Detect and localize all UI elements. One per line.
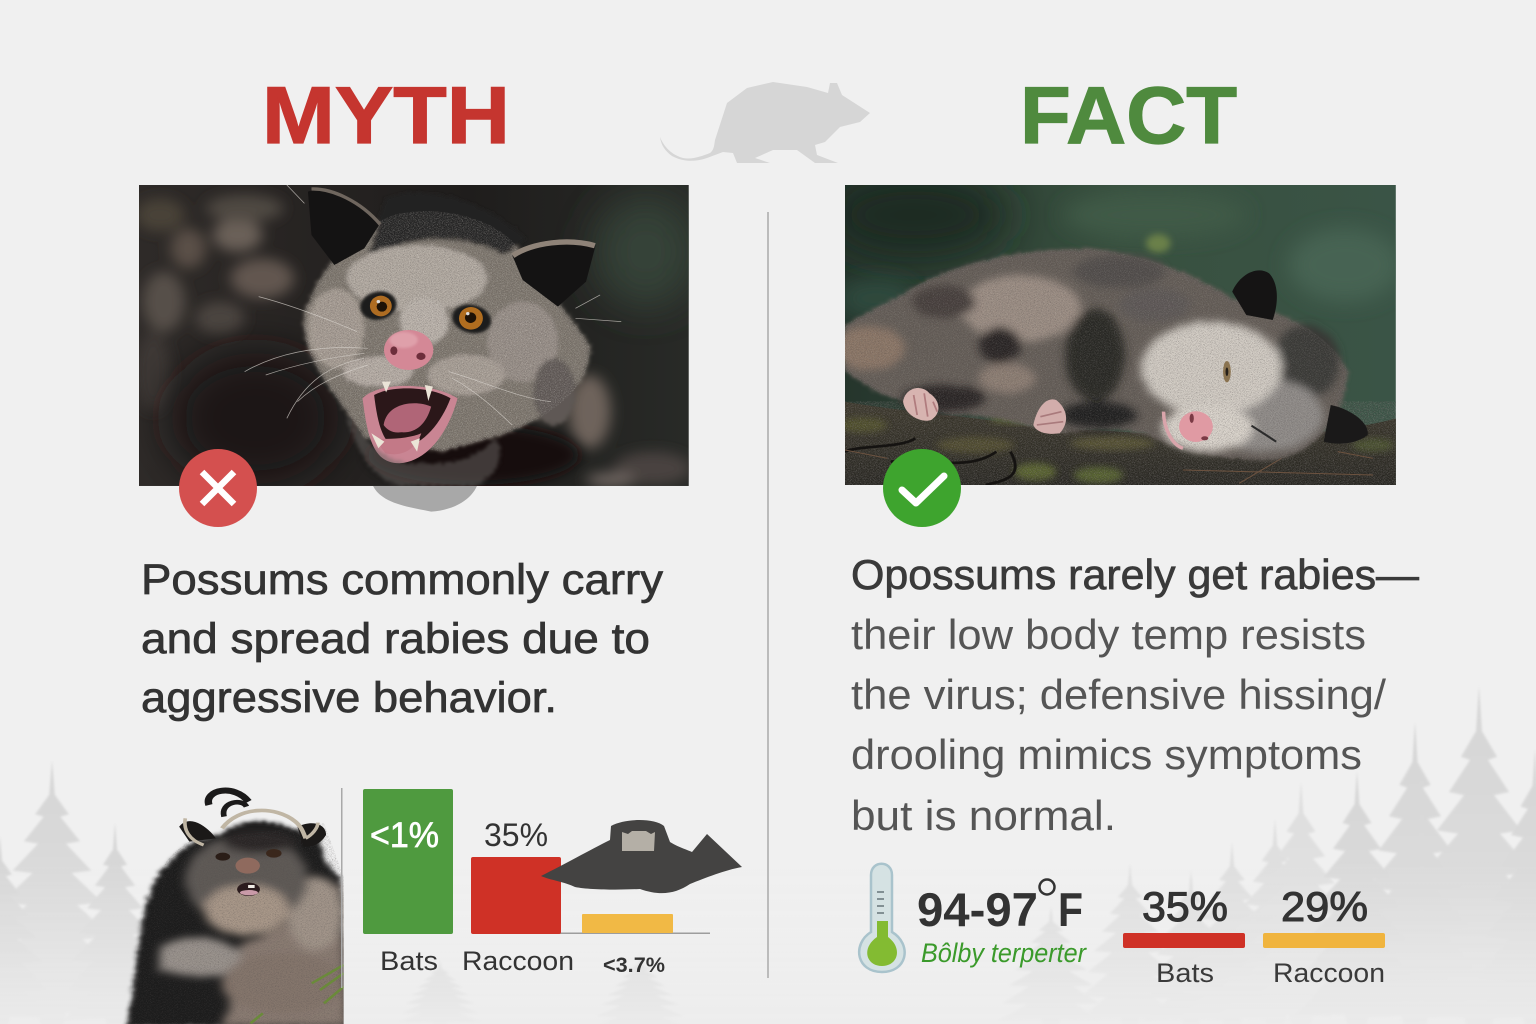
ears (308, 189, 596, 307)
stat: bats 35%: 35% (1142, 883, 1228, 930)
whiskers (245, 185, 621, 425)
label: Raccoon: Raccoon (462, 946, 574, 976)
icon: green check badge (883, 449, 961, 527)
icon: thermometer (859, 864, 905, 972)
bar chart: rabies rates (363, 789, 710, 977)
fur grain (845, 248, 1348, 460)
face features (1164, 361, 1276, 448)
possum body (834, 248, 1348, 460)
text block: fact statement: Opossums rarely get rabies— (851, 551, 1419, 598)
face features (215, 849, 282, 896)
paws (903, 388, 1066, 434)
grass (251, 965, 344, 1023)
eyes (357, 288, 495, 337)
fur grain (304, 211, 590, 452)
text block: myth statement: aggressive behavior. (141, 674, 557, 722)
stat: bats 35% (1123, 883, 1245, 988)
text block: myth statement: and spread rabies due to (141, 615, 650, 663)
title: MYTH: MYTH (262, 71, 510, 161)
icon: dark animal silhouette (541, 820, 742, 893)
text block: fact statement: but is normal. (851, 792, 1116, 839)
illustration: grumpy possum with headband (120, 770, 348, 1024)
ears and headband (179, 791, 326, 847)
text block: fact statement: the virus; defensive hissing/ (851, 671, 1386, 718)
title: FACT: FACT (1020, 71, 1237, 161)
axis line (555, 932, 710, 934)
background misty forest (0, 686, 1536, 1024)
center divider (767, 212, 769, 978)
ears (1232, 270, 1368, 444)
blurred fur of the body (135, 195, 692, 487)
label: Bats: Bats (1156, 958, 1214, 988)
mouth (363, 382, 458, 463)
nose (384, 330, 433, 370)
label: Raccoon: Raccoon (1273, 958, 1385, 988)
value: 35%: 35% (484, 817, 548, 853)
bar: yellow (582, 914, 673, 933)
bar: red (1123, 933, 1245, 948)
label: Bats: Bats (380, 946, 438, 976)
icon: red X badge (179, 449, 257, 527)
fur shadow below photo (373, 486, 477, 512)
value: <3.7%: <3.7% (603, 954, 665, 977)
bar: raccoon red (471, 857, 561, 934)
bar: yellow (1263, 933, 1385, 948)
text block: fact statement: their low body temp resists (851, 611, 1366, 658)
caption: body temperature: Bôlby terperter (921, 938, 1087, 968)
text block: fact statement: drooling mimics symptoms (851, 731, 1362, 778)
possum head (1141, 322, 1340, 452)
mossy log (838, 402, 1397, 485)
mist over the forest (0, 860, 1536, 1024)
value: <1%: <1% (370, 816, 439, 855)
stat: raccoon 29%: 29% (1281, 883, 1368, 930)
stat: body temperature: F (1058, 883, 1083, 936)
text block: fact statement (851, 551, 1419, 839)
stat: body temperature (917, 880, 1087, 968)
text block: myth statement (141, 556, 664, 722)
fur body (122, 818, 344, 1024)
stat: body temperature: 94-97 (917, 883, 1038, 936)
panel: myth photo of snarling possum (135, 185, 699, 512)
panel: fact photo of opossum playing dead (824, 172, 1401, 485)
rat silhouette (660, 82, 870, 163)
stat: raccoon 29% (1263, 883, 1385, 988)
ragged chest fur (347, 415, 500, 486)
text block: myth statement: Possums commonly carry (141, 556, 664, 604)
possum head (304, 193, 590, 452)
chart divider (341, 788, 342, 988)
bar: bats green (363, 789, 453, 934)
